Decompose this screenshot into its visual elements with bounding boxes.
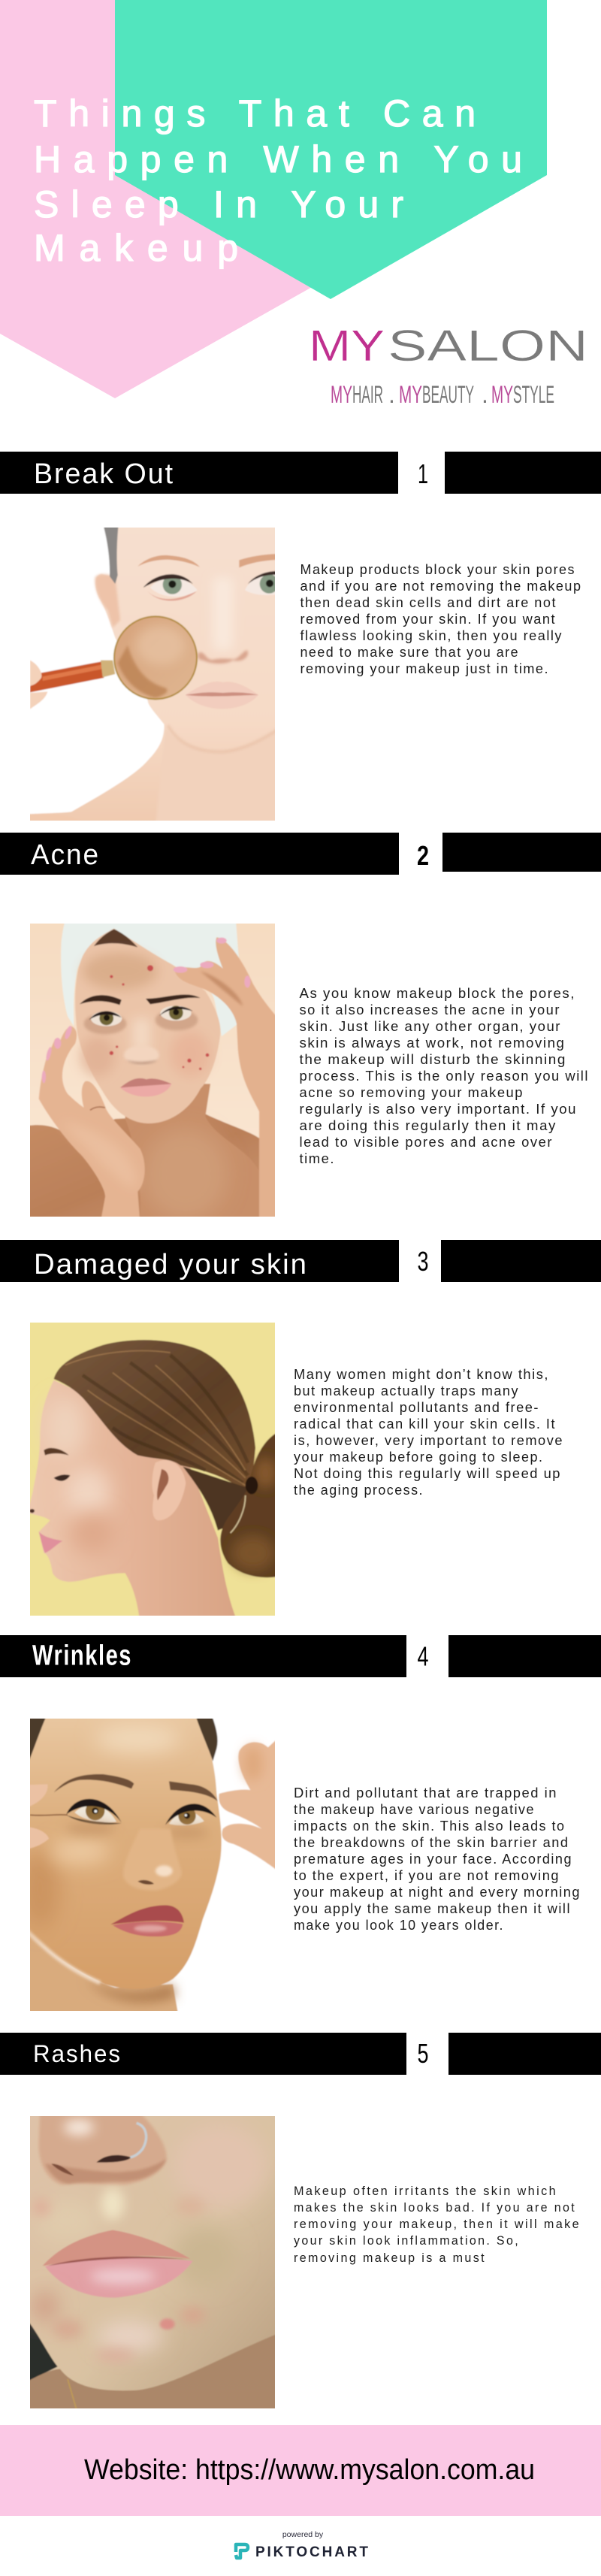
- hair: [54, 1340, 255, 1493]
- section 1 heading bar: [0, 452, 601, 494]
- eyes: [74, 1805, 116, 1822]
- text: break out: [300, 562, 581, 676]
- photo: side profile with hair bun: [30, 1323, 275, 1616]
- title: Sleep In Your: [34, 183, 403, 225]
- text: acne: skin is always at work, not removing: [299, 1036, 565, 1051]
- ear: [152, 1460, 186, 1520]
- title: Happen When You: [34, 138, 522, 180]
- text: acne: the makeup will disturb the skinning: [299, 1052, 566, 1067]
- photo: woman stretching wrinkles near eyes: [30, 1719, 275, 2011]
- title: [34, 92, 522, 269]
- powered by Piktochart: [236, 2530, 368, 2560]
- text: wrinkles: the breakdowns of the skin barrier and: [294, 1835, 569, 1850]
- text: damaged skin: the aging process.: [294, 1483, 424, 1498]
- right hand: [176, 936, 275, 1217]
- logo: MySalon: STYLE: [513, 381, 554, 408]
- section 3 heading bar: 3: [418, 1246, 428, 1277]
- text: damaged skin: radical that can kill your skin cells. It: [294, 1416, 556, 1432]
- section 2 heading bar: Acne: [31, 839, 100, 871]
- title: Things That Can: [34, 92, 476, 135]
- text: acne: As you know makeup block the pores,: [299, 986, 575, 1001]
- text: wrinkles: premature ages in your face. According: [294, 1852, 572, 1867]
- logo: MySalon: MY: [399, 381, 422, 408]
- text: acne: skin. Just like any other organ, your: [299, 1019, 561, 1034]
- text: damaged skin: but makeup actually traps many: [294, 1383, 519, 1398]
- text: rashes: [294, 2184, 581, 2265]
- face and neck: [28, 1380, 238, 1623]
- text: wrinkles: [294, 1785, 581, 1933]
- text: rashes: Makeup often irritants the skin which: [294, 2184, 557, 2198]
- section 2 heading bar: [0, 833, 601, 875]
- text: rashes: makes the skin looks bad. If you are not: [294, 2200, 576, 2215]
- text: damaged skin: [294, 1367, 563, 1498]
- logo: MySalon: BEAUTY: [422, 381, 474, 408]
- neck: [30, 1935, 179, 2011]
- powered by Piktochart: PIKTOCHART: [255, 2544, 368, 2560]
- text: break out: and if you are not removing the makeup: [300, 579, 581, 594]
- left hand: [39, 1026, 145, 1224]
- dark background: [30, 2323, 58, 2381]
- logo: MySalon: SALON: [388, 322, 588, 370]
- text: acne: regularly is also very important. If you: [299, 1102, 577, 1117]
- text: wrinkles: Dirt and pollutant that are trapped in: [294, 1785, 557, 1800]
- text: break out: removing your makeup just in time.: [300, 661, 549, 676]
- text: wrinkles: to the expert, if you are not removing: [294, 1868, 560, 1883]
- photo: woman with magnifying glass on cheek: [30, 528, 275, 821]
- text: damaged skin: Not doing this regularly will speed up: [294, 1466, 561, 1481]
- text: damaged skin: Many women might don’t know this,: [294, 1367, 549, 1382]
- text: damaged skin: is, however, very important to remove: [294, 1433, 563, 1448]
- section 1 heading bar: 1: [418, 458, 428, 489]
- nose: [123, 1829, 182, 1891]
- fingers left: [30, 1784, 48, 1807]
- website footer band: Website: https://www.mysalon.com.au: [84, 2454, 535, 2486]
- website footer band: [0, 2425, 601, 2516]
- text: break out: then dead skin cells and dirt are not: [300, 595, 557, 610]
- logo: MySalon: [309, 322, 588, 408]
- text: break out: Makeup products block your skin pores: [300, 562, 575, 577]
- text: acne: acne so removing your makeup: [299, 1085, 524, 1100]
- section 4 heading bar: Wrinkles: [32, 1640, 132, 1671]
- text: wrinkles: make you look 10 years older.: [294, 1918, 504, 1933]
- title: Makeup: [34, 227, 238, 269]
- photo: woman with towel and acne: [30, 924, 275, 1217]
- rash and chin: [32, 2291, 58, 2321]
- text: break out: need to make sure that you are: [300, 645, 519, 660]
- header background shapes: [0, 0, 547, 398]
- logo: MySalon: MY: [309, 322, 385, 370]
- icon: Piktochart logo: [236, 2544, 248, 2558]
- section 2 heading bar: 2: [417, 840, 429, 871]
- pink pentagon: [0, 0, 331, 398]
- logo: MySalon: .: [388, 381, 395, 408]
- text: wrinkles: you apply the same makeup then it will: [294, 1901, 571, 1916]
- text: damaged skin: environmental pollutants and free-: [294, 1400, 539, 1415]
- face: [75, 929, 221, 1123]
- logo: MySalon: MY: [331, 381, 352, 408]
- logo: MySalon: HAIR: [352, 381, 383, 408]
- text: wrinkles: impacts on the skin. This also leads to: [294, 1819, 565, 1834]
- neck: [30, 2334, 275, 2408]
- logo: MySalon: MY: [491, 381, 513, 408]
- text: wrinkles: the makeup have various negative: [294, 1802, 535, 1817]
- section 1 heading bar: Break Out: [34, 458, 174, 490]
- text: rashes: your skin look inflammation. So,: [294, 2233, 520, 2248]
- green pentagon: [115, 0, 547, 299]
- section 5 heading bar: 5: [418, 2038, 428, 2069]
- section 3 heading bar: Damaged your skin: [34, 1249, 308, 1280]
- bun: [219, 1433, 275, 1578]
- text: acne: time.: [299, 1151, 335, 1166]
- photo: lips and rash on chin: [30, 2116, 275, 2408]
- text: acne: lead to visible pores and acne over: [299, 1135, 553, 1150]
- text: acne: [299, 986, 589, 1166]
- text: break out: flawless looking skin, then you really: [300, 628, 563, 643]
- logo: MySalon: .: [482, 381, 488, 408]
- text: acne: so it also increases the acne in your: [299, 1002, 560, 1017]
- text: rashes: removing makeup is a must: [294, 2251, 486, 2265]
- text: damaged skin: your makeup before going to sleep.: [294, 1450, 544, 1465]
- handle: [30, 661, 104, 692]
- text: rashes: removing your makeup, then it will make: [294, 2217, 581, 2231]
- section 3 heading bar: [0, 1240, 601, 1282]
- text: wrinkles: your makeup at night and every morning: [294, 1885, 581, 1900]
- section 5 heading bar: [0, 2033, 601, 2075]
- towel: [61, 916, 240, 1036]
- face: [23, 1711, 222, 1989]
- nose: [39, 2109, 167, 2185]
- text: break out: removed from your skin. If you want: [300, 612, 556, 627]
- lips: [110, 1905, 184, 1924]
- text: acne: are doing this regularly then it may: [299, 1118, 557, 1133]
- powered by Piktochart: powered by: [282, 2530, 324, 2539]
- section 4 heading bar: [0, 1635, 601, 1677]
- lips: [43, 2230, 190, 2266]
- fingers right: [218, 1740, 275, 1870]
- section 4 heading bar: 4: [418, 1641, 428, 1671]
- text: acne: process. This is the only reason you will: [299, 1069, 589, 1084]
- section 5 heading bar: Rashes: [33, 2040, 122, 2067]
